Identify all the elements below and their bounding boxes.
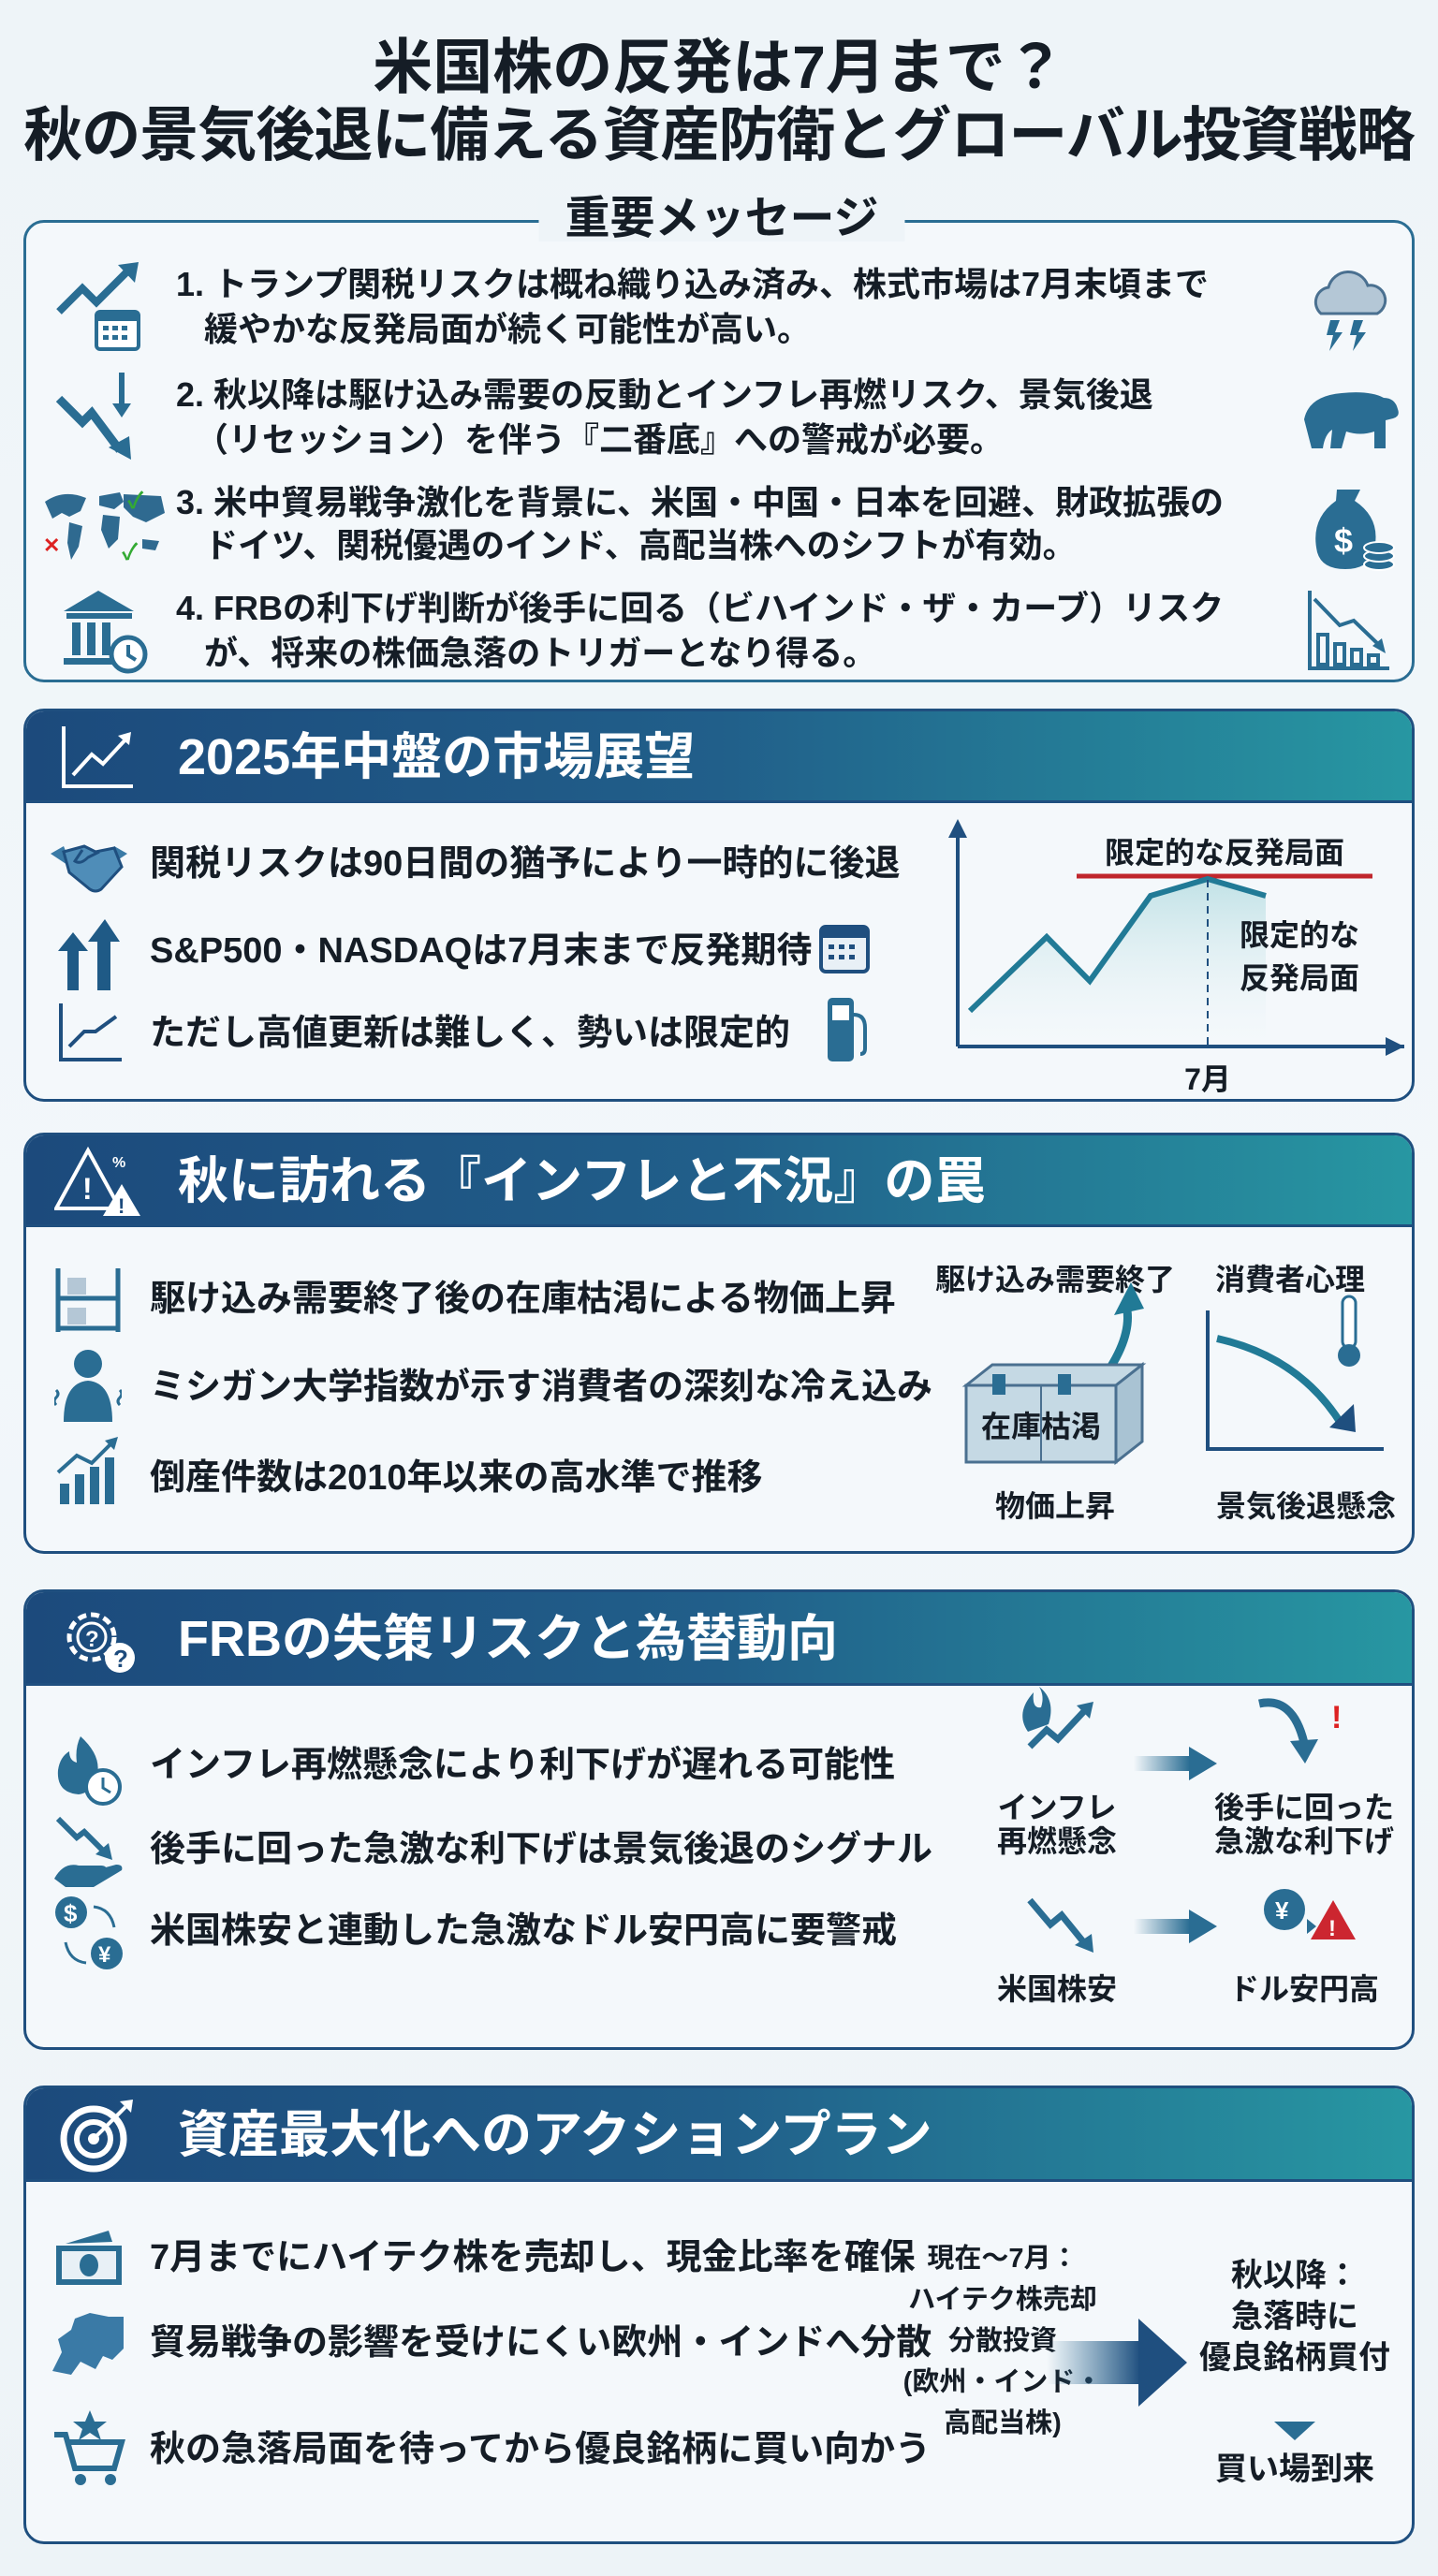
header: action plan	[26, 2088, 1412, 2182]
flow diagram: FRB: 再燃懸念	[997, 1824, 1117, 1858]
message 3	[176, 483, 1224, 564]
icon: storm cloud	[1314, 271, 1387, 351]
icon: fuel pump	[828, 998, 867, 1061]
flow diagram: FRB	[997, 1687, 1394, 2006]
title	[23, 34, 1416, 168]
icon: europe map	[52, 2313, 124, 2375]
message 3: 3. 米中貿易戦争激化を背景に、米国・中国・日本を回避、財政拡張の	[176, 483, 1224, 521]
icon: dollar yen	[55, 1896, 123, 1969]
message 2: 2. 秋以降は駆け込み需要の反動とインフレ再燃リスク、景気後退	[176, 375, 1153, 414]
flow diagram: FRB: 後手に回った	[1214, 1791, 1394, 1824]
icon: bear	[1304, 392, 1399, 448]
flow: autumn buy: 秋以降：	[1231, 2258, 1358, 2293]
icon: world map: ✕	[43, 534, 60, 557]
flow: now to July: (欧州・インド・	[903, 2367, 1102, 2397]
icon: world map: ✓	[122, 540, 139, 565]
row: cash: 7月までにハイテク株を売却し、現金比率を確保	[150, 2238, 916, 2277]
icon: warning triangles: !	[82, 1172, 93, 1206]
icon: dollar yen: ¥	[98, 1942, 111, 1968]
row: consumer: ミシガン大学指数が示す消費者の深刻な冷え込み	[150, 1368, 932, 1407]
line chart: limited rebound: 限定的な	[1240, 918, 1359, 952]
icon: cold person	[54, 1350, 122, 1422]
line chart: limited rebound: 7月	[1184, 1062, 1231, 1096]
heading: key messages: 重要メッセージ	[565, 194, 879, 243]
icon: warning triangles	[54, 1147, 140, 1218]
row: buy dip: 秋の急落局面を待ってから優良銘柄に買い向かう	[150, 2430, 931, 2469]
flow diagram: FRB: !	[1328, 1916, 1336, 1941]
flow: autumn buy: 優良銘柄買付	[1199, 2340, 1390, 2376]
diagram: inventory depletion: 景気後退懸念	[1216, 1489, 1396, 1523]
title: 秋の景気後退に備える資産防衛とグローバル投資戦略	[23, 103, 1415, 168]
flow diagram: FRB: 急激な利下げ	[1214, 1824, 1394, 1858]
header: market outlook: 2025年中盤の市場展望	[178, 729, 695, 785]
row: diversify: 貿易戦争の影響を受けにくい欧州・インドへ分散	[150, 2323, 932, 2363]
message 2: （リセッション）を伴う『二番底』への警戒が必要。	[195, 420, 1004, 459]
panel: market outlook	[23, 709, 1415, 1102]
header: autumn trap: 秋に訪れる『インフレと不況』の罠	[178, 1153, 985, 1209]
message 3: ドイツ、関税優遇のインド、高配当株へのシフトが有効。	[204, 526, 1077, 564]
header: market outlook	[26, 711, 1412, 803]
flow: autumn buy: 急落時に	[1231, 2299, 1358, 2334]
panel: action plan	[23, 2086, 1415, 2544]
flow diagram: FRB: 米国株安	[997, 1972, 1117, 2006]
panel: key messages	[23, 220, 1415, 682]
flow: now to July: 分散投資	[948, 2326, 1057, 2356]
row: bankruptcies: 倒産件数は2010年以来の高水準で推移	[150, 1458, 763, 1498]
row: inventory: 駆け込み需要終了後の在庫枯渇による物価上昇	[150, 1280, 896, 1319]
icon: world map	[43, 489, 165, 565]
icon: money bag: $	[1334, 521, 1353, 560]
icon: warning triangles: !	[118, 1194, 125, 1218]
icon: money bag	[1315, 490, 1395, 571]
icon: hand down arrow	[54, 1816, 122, 1887]
icon: rising bars	[56, 1437, 118, 1504]
diagram: inventory depletion: 消費者心理	[1215, 1263, 1365, 1296]
message 2	[176, 375, 1153, 459]
icon: flame clock	[58, 1736, 122, 1806]
header: autumn trap	[26, 1135, 1412, 1227]
flow: buying opportunity: 買い場到来	[1215, 2452, 1374, 2487]
icon: shelves	[56, 1268, 120, 1332]
panel: FRB risk	[23, 1589, 1415, 2050]
icon: handshake	[51, 844, 127, 893]
icon: calendar	[819, 925, 870, 973]
message 4: 4. FRBの利下げ判断が後手に回る（ビハインド・ザ・カーブ）リスク	[176, 589, 1224, 627]
icon: chart line	[62, 726, 133, 788]
header: FRB risk: FRBの失策リスクと為替動向	[178, 1611, 838, 1667]
line chart: limited rebound: 限定的な反発局面	[1105, 836, 1344, 870]
flow: autumn buy	[1199, 2258, 1390, 2376]
message 1: 緩やかな反発局面が続く可能性が高い。	[204, 310, 811, 348]
flow diagram: FRB: ドル安円高	[1229, 1972, 1379, 2006]
icon: cash	[56, 2231, 122, 2285]
diagram: inventory depletion: 在庫枯渇	[981, 1410, 1101, 1443]
message 1: 1. トランプ関税リスクは概ね織り込み済み、株式市場は7月末頃まで	[176, 265, 1209, 303]
icon: small down triangle	[1274, 2422, 1315, 2440]
flow diagram: FRB: !	[1331, 1700, 1342, 1735]
icon: dollar yen: $	[64, 1899, 78, 1927]
diagram: inventory depletion: 物価上昇	[995, 1489, 1115, 1523]
icon: world map: ✓	[127, 489, 144, 514]
icon: flat line chart	[59, 1003, 122, 1061]
row: limited momentum: ただし高値更新は難しく、勢いは限定的	[150, 1014, 790, 1053]
icon: gear question	[67, 1612, 135, 1673]
icon: bank clock	[64, 591, 148, 674]
diagram: inventory depletion	[935, 1263, 1396, 1523]
flow: now to July	[903, 2244, 1102, 2438]
flow diagram: FRB: インフレ	[997, 1791, 1117, 1824]
message 4	[176, 589, 1224, 672]
row: yen: 米国株安と連動した急激なドル安円高に要警戒	[150, 1911, 897, 1951]
row: S&P500: S&P500・NASDAQは7月末まで反発期待	[150, 931, 812, 971]
icon: warning triangles: %	[112, 1155, 125, 1171]
icon: target	[60, 2100, 133, 2172]
icon: gear question: ?	[85, 1627, 99, 1652]
title: 米国株の反発は7月まで？	[373, 34, 1065, 101]
flow: now to July: 高配当株)	[944, 2408, 1062, 2438]
message 1	[176, 265, 1209, 348]
message 4: が、将来の株価急落のトリガーとなり得る。	[204, 634, 876, 672]
icon: cart star	[54, 2410, 125, 2485]
icon: declining bar chart	[1308, 591, 1389, 670]
arrow: big gradient	[1050, 2319, 1187, 2407]
panel: autumn trap	[23, 1133, 1415, 1554]
icon: up arrows	[58, 919, 120, 990]
header: action plan: 資産最大化へのアクションプラン	[178, 2107, 932, 2163]
header: FRB risk	[26, 1592, 1412, 1686]
icon: gear question: ?	[113, 1645, 128, 1673]
flow: now to July: ハイテク株売却	[908, 2285, 1097, 2315]
icon: up arrow calendar	[56, 262, 140, 351]
icon: down zigzag	[56, 373, 131, 460]
line chart: limited rebound: 反発局面	[1240, 961, 1359, 995]
line chart: limited rebound	[948, 819, 1404, 1096]
flow: now to July: 現在〜7月：	[927, 2244, 1078, 2274]
row: inflation: インフレ再燃懸念により利下げが遅れる可能性	[150, 1746, 895, 1785]
flow diagram: FRB: ¥	[1275, 1896, 1289, 1925]
diagram: inventory depletion: 駆け込み需要終了	[935, 1263, 1175, 1296]
row: tariffs: 関税リスクは90日間の猶予により一時的に後退	[150, 844, 901, 884]
row: rate cut: 後手に回った急激な利下げは景気後退のシグナル	[150, 1830, 932, 1869]
